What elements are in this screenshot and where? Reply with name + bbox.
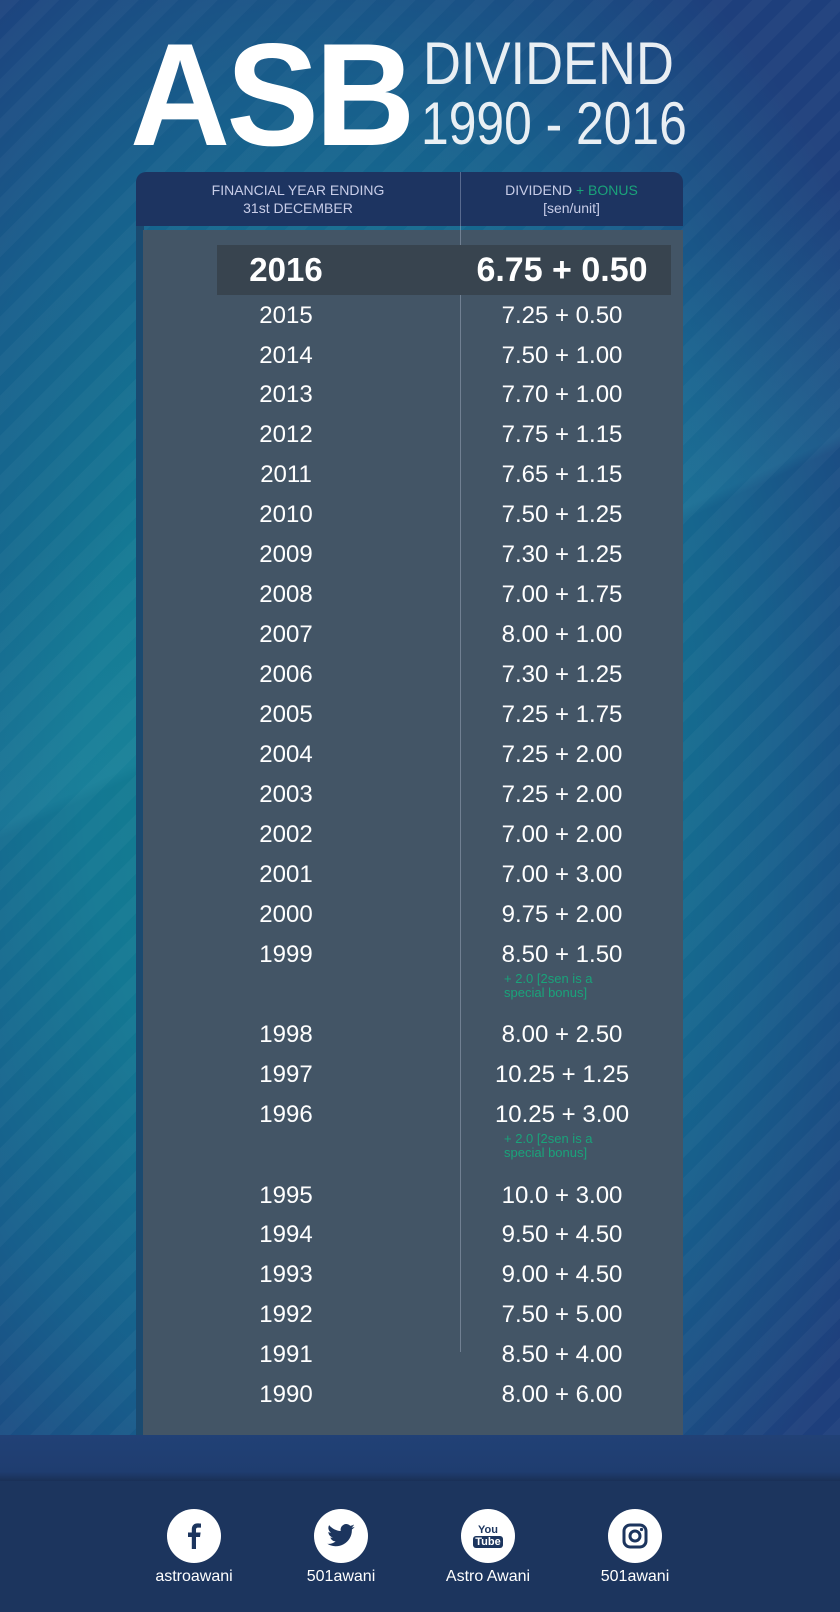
data rows: 7.25 + 2.00 — [502, 741, 622, 768]
data rows: special bonus] — [504, 985, 587, 1000]
data rows: 7.50 + 5.00 — [502, 1301, 622, 1328]
data rows: 1997 — [259, 1061, 313, 1088]
data rows: 7.30 + 1.25 — [502, 541, 622, 568]
data rows: 1990 — [259, 1381, 313, 1408]
data rows: 1991 — [259, 1341, 313, 1368]
table panel — [136, 172, 683, 1435]
icon: instagram — [608, 1509, 662, 1563]
data rows: 2012 — [259, 421, 313, 448]
background lighter facet — [0, 0, 840, 880]
data rows: 1995 — [259, 1182, 313, 1209]
icon: youtube: You — [478, 1524, 498, 1536]
data rows: 1994 — [259, 1221, 313, 1248]
data rows: 7.00 + 3.00 — [502, 861, 622, 888]
data rows: 2004 — [259, 741, 313, 768]
data rows: 2002 — [259, 821, 313, 848]
data rows: 2001 — [259, 861, 313, 888]
icon: facebook — [167, 1509, 221, 1563]
data rows: 2003 — [259, 781, 313, 808]
highlight row 2016 — [217, 245, 671, 295]
footer — [0, 1435, 840, 1612]
data rows: 2005 — [259, 701, 313, 728]
header: year column — [212, 182, 384, 216]
data rows: 7.25 + 2.00 — [502, 781, 622, 808]
header: dividend column: [sen/unit] — [543, 200, 600, 216]
value 2016: 6.75 + 0.50 — [476, 251, 648, 289]
data rows: + 2.0 [2sen is a — [504, 971, 593, 986]
data rows: 7.50 + 1.25 — [502, 501, 622, 528]
data rows: 8.00 + 1.00 — [502, 621, 622, 648]
data rows: 8.00 + 6.00 — [502, 1381, 622, 1408]
title: years: 1990 - 2016 — [421, 90, 687, 157]
data rows: 7.30 + 1.25 — [502, 661, 622, 688]
data rows: 7.00 + 1.75 — [502, 581, 622, 608]
left shadow strip — [136, 212, 144, 1435]
data rows: 8.00 + 2.50 — [502, 1021, 622, 1048]
data rows: 2000 — [259, 901, 313, 928]
icon: youtube — [461, 1509, 515, 1563]
data rows: 2006 — [259, 661, 313, 688]
icon: twitter — [314, 1509, 368, 1563]
data rows: 8.50 + 1.50 — [502, 941, 622, 968]
title — [130, 13, 687, 176]
data rows: 7.65 + 1.15 — [502, 461, 622, 488]
data rows: 1993 — [259, 1261, 313, 1288]
label: Astro Awani: Astro Awani — [446, 1568, 530, 1585]
data rows: 10.25 + 1.25 — [495, 1061, 629, 1088]
data rows: 1998 — [259, 1021, 313, 1048]
data rows: 2011 — [260, 461, 312, 488]
data rows: 2007 — [259, 621, 313, 648]
data rows: 10.0 + 3.00 — [502, 1182, 622, 1209]
data rows: 1999 — [259, 941, 313, 968]
data rows: 7.25 + 0.50 — [502, 302, 622, 329]
label: 501awani instagram: 501awani — [601, 1568, 669, 1585]
data rows: 2013 — [259, 381, 313, 408]
data rows: 8.50 + 4.00 — [502, 1341, 622, 1368]
data rows: + 2.0 [2sen is a — [504, 1131, 593, 1146]
data rows: 2015 — [259, 302, 313, 329]
data rows: special bonus] — [504, 1145, 587, 1160]
header: dividend column: DIVIDEND + BONUS — [505, 182, 638, 198]
data rows: 2010 — [259, 501, 313, 528]
data rows: 9.75 + 2.00 — [502, 901, 622, 928]
title: ASB: ASB — [130, 13, 411, 176]
data rows: 2008 — [259, 581, 313, 608]
data rows: 7.25 + 1.75 — [502, 701, 622, 728]
data rows: 1996 — [259, 1101, 313, 1128]
data rows: 9.50 + 4.50 — [502, 1221, 622, 1248]
label: astroawani: astroawani — [155, 1568, 233, 1585]
data rows: 9.00 + 4.50 — [502, 1261, 622, 1288]
title: DIVIDEND: DIVIDEND — [423, 30, 674, 97]
data rows: 7.75 + 1.15 — [502, 421, 622, 448]
header: year column: FINANCIAL YEAR ENDING — [212, 182, 384, 198]
data rows: 7.00 + 2.00 — [502, 821, 622, 848]
label: 501awani twitter: 501awani — [307, 1568, 375, 1585]
data rows: 7.50 + 1.00 — [502, 342, 622, 369]
table header — [136, 172, 683, 226]
data rows: 2014 — [259, 342, 313, 369]
header: dividend column — [505, 182, 638, 216]
column divider — [460, 172, 461, 1352]
data rows: 10.25 + 3.00 — [495, 1101, 629, 1128]
data rows: 2009 — [259, 541, 313, 568]
data rows: 7.70 + 1.00 — [502, 381, 622, 408]
year 2016: 2016 — [249, 251, 323, 288]
table body — [143, 230, 683, 1435]
data rows: 1992 — [259, 1301, 313, 1328]
icon: youtube: Tube — [475, 1536, 501, 1548]
header: year column: 31st DECEMBER — [243, 200, 353, 216]
